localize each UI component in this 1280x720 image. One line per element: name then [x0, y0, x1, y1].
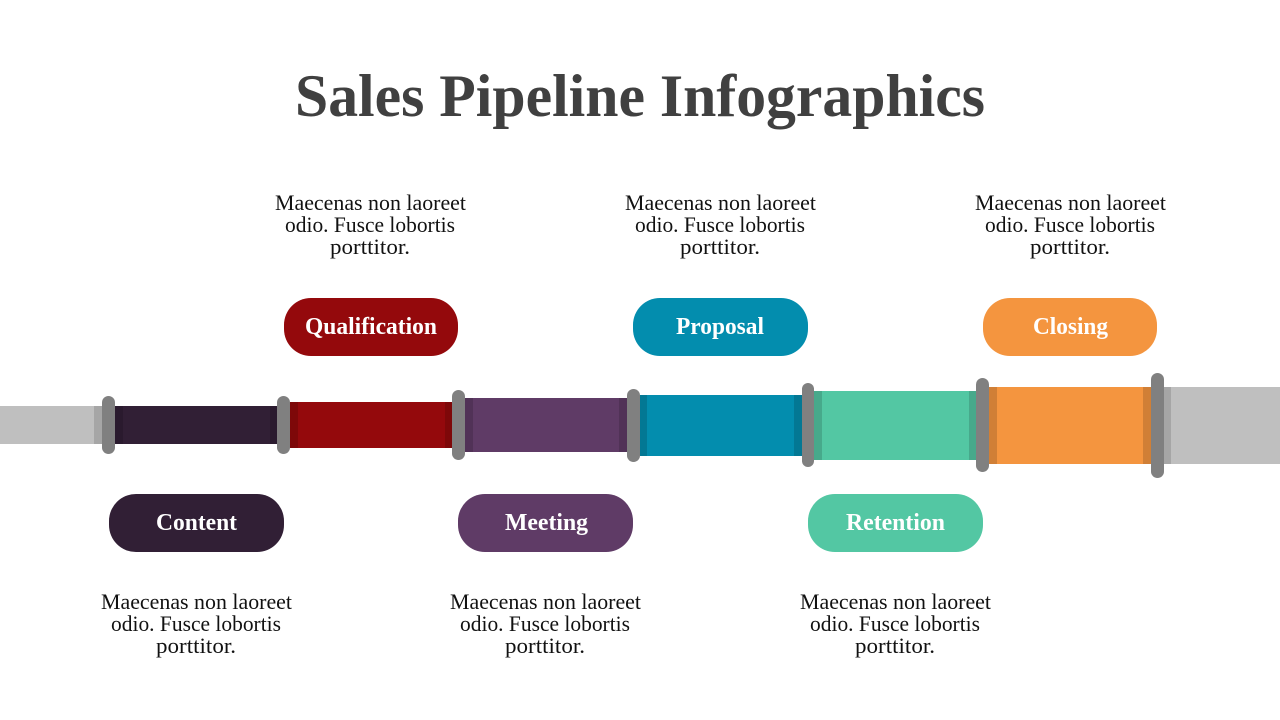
pill: Meeting: Meeting	[505, 510, 588, 536]
pill: Content	[109, 494, 284, 552]
pill: Qualification: Qualification	[305, 314, 437, 340]
text block: retention: Maecenas non laoreet	[800, 589, 991, 614]
text block: closing: porttitor.	[1030, 234, 1110, 259]
text block: content	[101, 589, 292, 658]
pipeline	[0, 373, 1280, 478]
text block: meeting: Maecenas non laoreet	[450, 589, 641, 614]
pill: Retention: Retention	[846, 510, 945, 536]
pill: Meeting	[458, 494, 633, 552]
pill: Qualification	[284, 298, 458, 356]
pill: Proposal	[633, 298, 808, 356]
text block: content: Maecenas non laoreet	[101, 589, 292, 614]
text block: qualification: odio. Fusce lobortis	[285, 212, 455, 237]
pill: Content: Content	[156, 510, 237, 536]
pill: Closing: Closing	[1033, 314, 1108, 340]
text block: content: porttitor.	[156, 633, 236, 658]
text block: qualification: porttitor.	[330, 234, 410, 259]
text block: closing: Maecenas non laoreet	[975, 190, 1166, 215]
title: Sales Pipeline Infographics	[295, 63, 985, 129]
pipe: right gray outlet	[1164, 387, 1280, 464]
pipe: content segment	[115, 406, 277, 444]
text block: proposal: porttitor.	[680, 234, 760, 259]
pipe: closing segment	[989, 387, 1151, 464]
text block: proposal	[625, 190, 816, 259]
pipe: retention segment	[814, 391, 976, 460]
text block: meeting: odio. Fusce lobortis	[460, 611, 630, 636]
pipe: meeting segment	[465, 398, 627, 452]
text block: proposal: odio. Fusce lobortis	[635, 212, 805, 237]
text block: retention: odio. Fusce lobortis	[810, 611, 980, 636]
text block: qualification	[275, 190, 466, 259]
text block: content: odio. Fusce lobortis	[111, 611, 281, 636]
text block: retention: porttitor.	[855, 633, 935, 658]
pipe: proposal segment	[640, 395, 802, 456]
pipe: qualification segment	[290, 402, 452, 448]
text block: proposal: Maecenas non laoreet	[625, 190, 816, 215]
pill: Proposal: Proposal	[676, 314, 764, 340]
pipe collars	[102, 373, 1164, 478]
pipe: left gray inlet	[0, 406, 102, 444]
text block: meeting	[450, 589, 641, 658]
text block: qualification: Maecenas non laoreet	[275, 190, 466, 215]
text block: closing: odio. Fusce lobortis	[985, 212, 1155, 237]
pill: Closing	[983, 298, 1157, 356]
pill: Retention	[808, 494, 983, 552]
text block: meeting: porttitor.	[505, 633, 585, 658]
text block: closing	[975, 190, 1166, 259]
text block: retention	[800, 589, 991, 658]
